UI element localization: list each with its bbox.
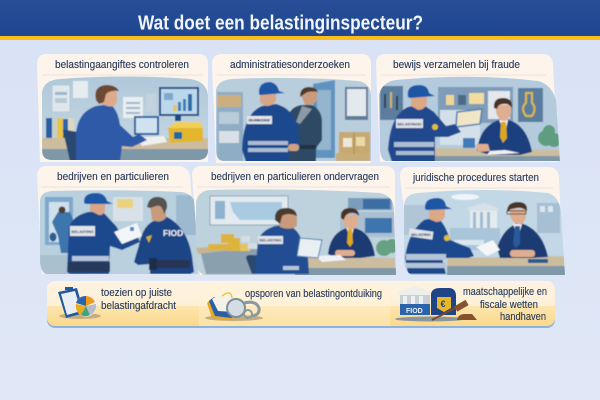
scene: interview [196,189,396,275]
panel: administratiesonderzoeken [212,54,374,164]
text: wetten handhaven: maatschappelijke en [463,286,547,298]
scene: two inspectors reviewing paper [40,190,198,274]
item: wetten handhaven: handhaven [500,311,546,323]
item: wetten handhaven [395,286,547,323]
scene: collecting evidence: BELASTINGD [398,122,422,126]
title: Wat doet een belastinginspecteur? [138,12,423,34]
panel heading: bedrijven en particulieren ondervragen [211,171,379,183]
panel: juridische procedures starten [400,167,570,278]
panel heading: bewijs verzamelen bij fraude [393,59,520,71]
item: wetten handhaven: fiscale wetten [480,299,538,311]
scene: two inspectors reviewing paper: FIOD [163,228,183,238]
panel heading: belastingaangiftes controleren [55,59,189,71]
icon: FIOD building, backpack and gavel [395,286,477,322]
icon: FIOD building, backpack and gavel: FIOD [406,308,423,315]
panel heading: bedrijven en particulieren [57,171,169,183]
text: opsporen: opsporen van belastingontduiking [245,288,382,300]
summary strip [47,281,555,328]
scene: collecting evidence [379,76,560,161]
icon: clipboard with pie chart [58,287,101,319]
scene: handing over legal papers [404,190,565,275]
scene: handing over legal papers: BELASTING [411,232,431,237]
scene: inspector escorting suspect: BELASTINGDIENST [248,118,271,122]
panel heading: administratiesonderzoeken [230,59,350,71]
icon: FIOD building, backpack and gavel: € [440,299,446,309]
item: opsporen [205,288,382,321]
scene: interview: BELASTING [260,238,282,242]
panel: bewijs verzamelen bij fraude [376,54,564,164]
scene: two inspectors reviewing paper: BELASTING [72,229,94,234]
scene: inspector at desk with monitor [42,76,208,160]
panel: belastingaangiftes controleren [37,54,212,164]
panel: bedrijven en particulieren ondervragen [192,166,400,278]
header band [0,0,600,40]
panel heading: juridische procedures starten [412,172,539,184]
scene: inspector escorting suspect [216,78,371,161]
text: toezien: toezien op juiste [101,287,172,299]
item: toezien: belastingafdracht [101,300,176,312]
panel: bedrijven en particulieren [36,166,202,278]
item: toezien [58,287,176,319]
icon: book, magnifier and handcuffs [205,293,263,321]
